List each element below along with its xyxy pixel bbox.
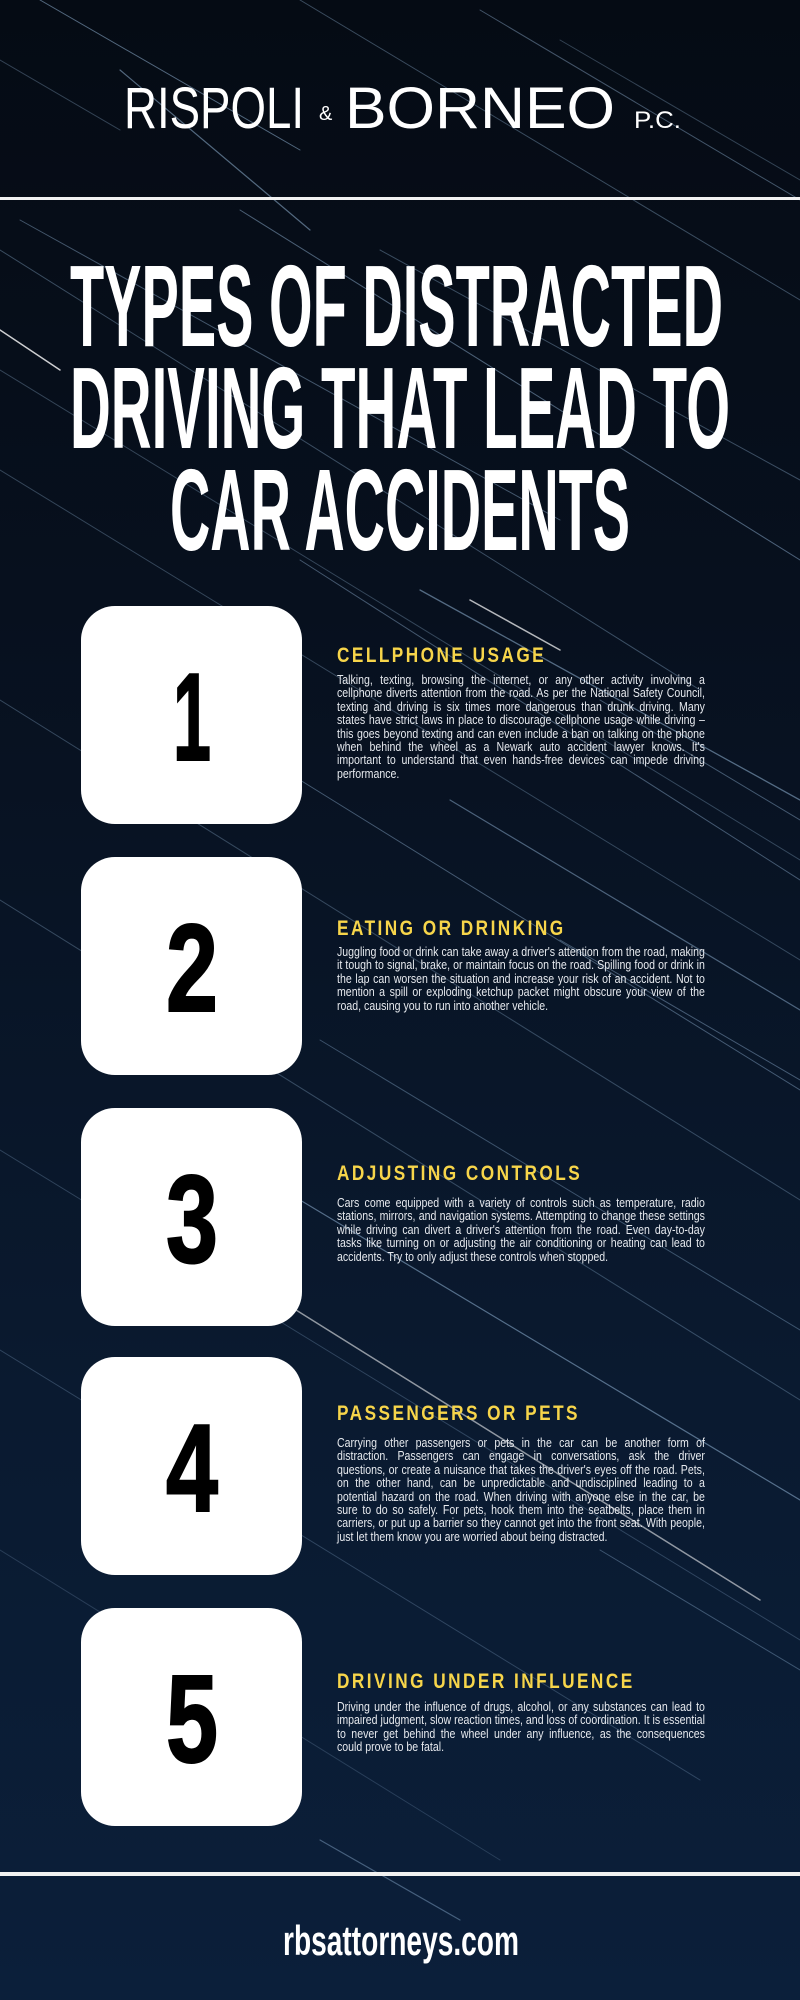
text 2: Juggling food or drink can take away a driver's attention from the road, making it tough to signal, brake, or maintain focus on the road. Spilling food or drink in the lap can worsen the situation and increase your risk of an accident. Not to mention a spill or exploding ketchup packet might obscure your view of the road, causing you to run into another vehicle. [337, 945, 705, 1013]
logo: & [319, 103, 333, 125]
number box 1 [81, 606, 302, 824]
number box 3 [81, 1108, 302, 1326]
logo: P.C. [634, 107, 681, 134]
number box 5: 5 [166, 1651, 218, 1789]
number box 2: 2 [166, 900, 218, 1038]
text 3: Cars come equipped with a variety of controls such as temperature, radio stations, mirrors, and navigation systems. Attempting to change these settings while driving can divert a driver's attention from the road. Even day-to-day tasks like turning on or adjusting the air conditioning or heating can lead to accidents. Try to only adjust these controls when stopped. [337, 1196, 705, 1264]
item 3 [81, 1108, 705, 1326]
item 2 [81, 857, 705, 1075]
heading 5: DRIVING UNDER INFLUENCE [337, 1670, 635, 1693]
text 4: Carrying other passengers or pets in the car can be another form of distraction. Passengers can engage in conversations, ask the driver questions, or create a nuisance that takes the driver's eyes off the road. Pets, on the other hand, can be unpredictable and undisciplined leading to a potential hazard on the road. When driving with anyone else in the car, be sure to do so safely. For pets, hook them into the seatbelts, place them in carriers, or put up a barrier so they cannot get into the front seat. With people, just let them know you are worried about being distracted. [337, 1436, 705, 1544]
logo [124, 76, 681, 140]
heading 2: EATING OR DRINKING [337, 917, 566, 940]
number box 5 [81, 1608, 302, 1826]
item 1 [81, 606, 705, 824]
number box 3: 3 [166, 1151, 218, 1289]
text 1: Talking, texting, browsing the internet, or any other activity involving a cellphone diverts attention from the road. As per the National Safety Council, texting and driving is six times more dangerous than drunk driving. Many states have strict laws in place to discourage cellphone usage while driving – this goes beyond texting and can even include a ban on talking on the phone when behind the wheel as a Newark auto accident lawyer knows. It's important to understand that even hands-free devices can impede driving performance. [337, 673, 705, 781]
logo: BORNEO [345, 76, 615, 140]
heading 4: PASSENGERS OR PETS [337, 1402, 580, 1425]
number box 2 [81, 857, 302, 1075]
footer url: rbsattorneys.com [283, 1917, 519, 1964]
number box 1: 1 [173, 649, 211, 787]
number box 4 [81, 1357, 302, 1575]
heading 1: CELLPHONE USAGE [337, 644, 546, 667]
item 4 [81, 1357, 705, 1575]
title [70, 250, 730, 560]
logo: RISPOLI [124, 76, 304, 140]
number box 4: 4 [166, 1400, 218, 1538]
heading 3: ADJUSTING CONTROLS [337, 1162, 582, 1185]
text 5: Driving under the influence of drugs, alcohol, or any substances can lead to impaired judgment, slow reaction times, and loss of coordination. It is essential to never get behind the wheel under any influence, as the consequences could prove to be fatal. [337, 1700, 705, 1754]
item 5 [81, 1608, 705, 1826]
